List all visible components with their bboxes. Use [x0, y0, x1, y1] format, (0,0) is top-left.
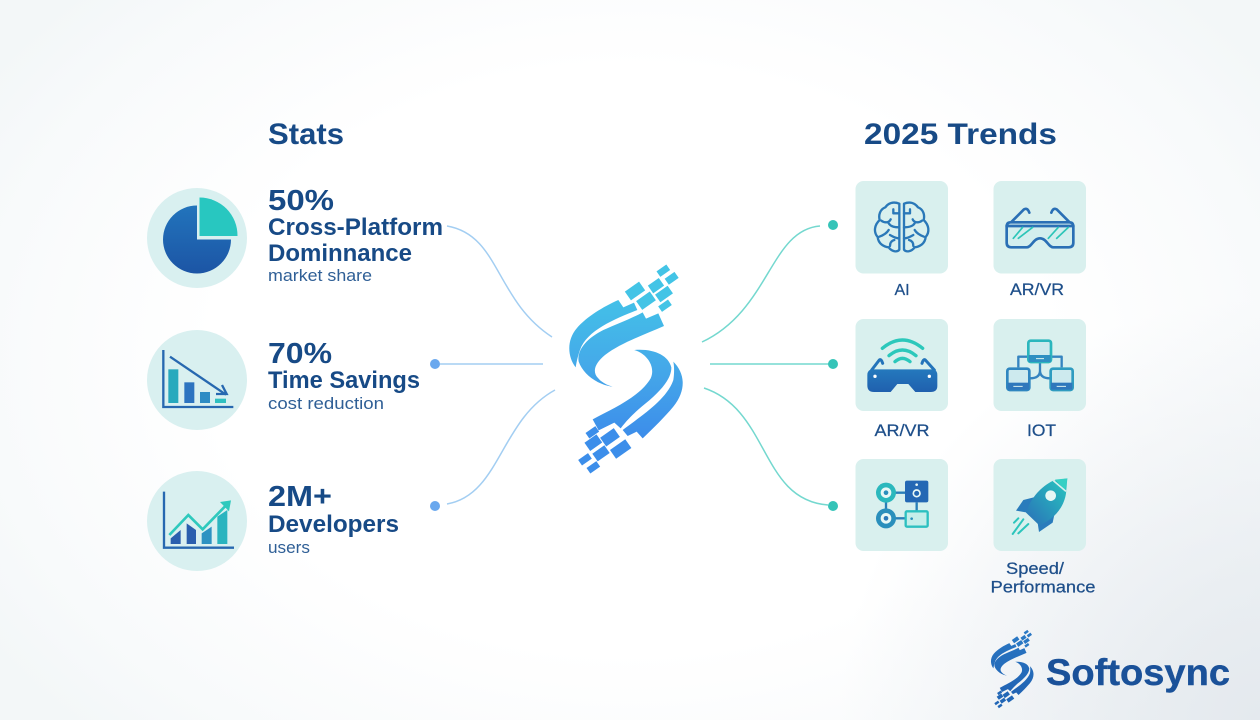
label: IOT: IOT [1027, 422, 1056, 440]
label: AI: AI [894, 282, 910, 299]
stat text: 2M+ Developers: users [268, 538, 310, 557]
icon: connected nodes [876, 481, 928, 528]
icon: brain [875, 203, 928, 251]
connectors: logo to trends [702, 220, 838, 511]
stat text: 70% Time Savings: 70% [268, 338, 332, 370]
icon: small S mark [991, 630, 1034, 708]
label: Speed/Performance: Speed/ [1006, 559, 1064, 578]
card: speed/performance [990, 459, 1096, 596]
stat text: 50% Cross-Platform Dominnance: Cross-Platform [268, 214, 443, 241]
card: AI [856, 181, 948, 299]
label: Speed/Performance: Performance [990, 578, 1096, 596]
icon: pie chart [147, 188, 247, 288]
stat text: 70% Time Savings [268, 338, 420, 413]
stat text: 70% Time Savings: cost reduction [268, 394, 384, 413]
stat text: 50% Cross-Platform Dominnance: market share [268, 266, 372, 285]
icon: network of devices [1007, 341, 1073, 390]
card: workflow [856, 459, 948, 551]
icon: VR headset with signal [867, 340, 937, 392]
stat text: 50% Cross-Platform Dominnance: Dominnance [268, 240, 412, 267]
icon: glasses [1007, 209, 1073, 247]
stat text: 70% Time Savings: Time Savings [268, 367, 420, 394]
panel: stat 50% market share [147, 185, 443, 288]
stat text: 50% Cross-Platform Dominnance: 50% [268, 185, 334, 217]
brand logo: Softosync [991, 630, 1230, 708]
card: AR/VR glasses [994, 181, 1086, 299]
card: IOT [994, 319, 1086, 440]
panel: stat 2M+ users [147, 471, 399, 571]
wordmark: Softosync [1046, 652, 1230, 693]
heading: 2025 Trends: 2025 Trends [864, 118, 1057, 151]
connectors: stats to logo [430, 226, 555, 511]
panel: stat 70% cost reduction [147, 330, 420, 430]
label: AR/VR: AR/VR [1010, 281, 1064, 299]
icon: descending bar chart [147, 330, 247, 430]
label: Speed/Performance [990, 559, 1096, 596]
card: AR/VR headset [856, 319, 948, 440]
central S logo [569, 264, 683, 474]
icon: rising bar chart [147, 471, 247, 571]
heading: Stats: Stats [268, 118, 344, 151]
stat text: 2M+ Developers: Developers [268, 511, 399, 538]
stat text: 2M+ Developers: 2M+ [268, 481, 332, 513]
label: AR/VR: AR/VR [874, 421, 930, 440]
stat text: 2M+ Developers [268, 481, 399, 557]
stat text: 50% Cross-Platform Dominnance [268, 185, 443, 285]
icon: rocket [1013, 478, 1067, 534]
